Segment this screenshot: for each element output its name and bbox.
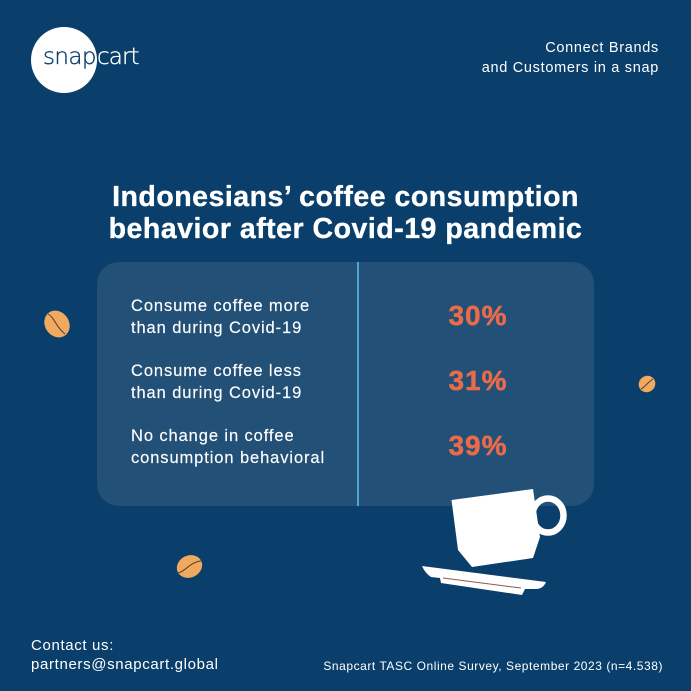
logo: snapcart: cart	[97, 44, 139, 70]
tagline: and Customers in a snap	[482, 60, 659, 76]
panel: survey results	[97, 262, 594, 506]
title	[109, 181, 582, 245]
contact	[31, 637, 219, 673]
value: 30%: 30%	[448, 300, 508, 331]
value: 39%: 39%	[448, 430, 508, 461]
label: consume more: than during Covid-19	[131, 319, 302, 337]
tagline	[482, 40, 659, 76]
label: no change: consumption behavioral	[131, 449, 325, 467]
icon: coffee bean right	[638, 376, 656, 392]
icon: coffee bean left	[44, 310, 70, 338]
label: no change	[131, 427, 325, 467]
label: consume less	[131, 362, 302, 402]
title: behavior after Covid-19 pandemic	[109, 213, 582, 245]
tagline: Connect Brands	[545, 40, 659, 56]
logo: snapcart: snap	[43, 44, 96, 70]
contact: partners@snapcart.global	[31, 656, 219, 673]
title: Indonesians’ coffee consumption	[112, 181, 579, 213]
label: consume less: Consume coffee less	[131, 362, 302, 380]
label: consume less: than during Covid-19	[131, 384, 302, 402]
label: no change: No change in coffee	[131, 427, 295, 445]
icon: coffee cup and saucer	[422, 489, 567, 595]
label: consume more	[131, 297, 310, 337]
label: consume more: Consume coffee more	[131, 297, 310, 315]
icon: coffee bean bottom	[176, 555, 202, 578]
divider line	[357, 262, 359, 506]
source note: Snapcart TASC Online Survey, September 2023 (n=4.538)	[323, 659, 663, 673]
logo: snapcart	[31, 27, 139, 93]
contact: Contact us:	[31, 637, 114, 654]
value: 31%: 31%	[448, 365, 508, 396]
